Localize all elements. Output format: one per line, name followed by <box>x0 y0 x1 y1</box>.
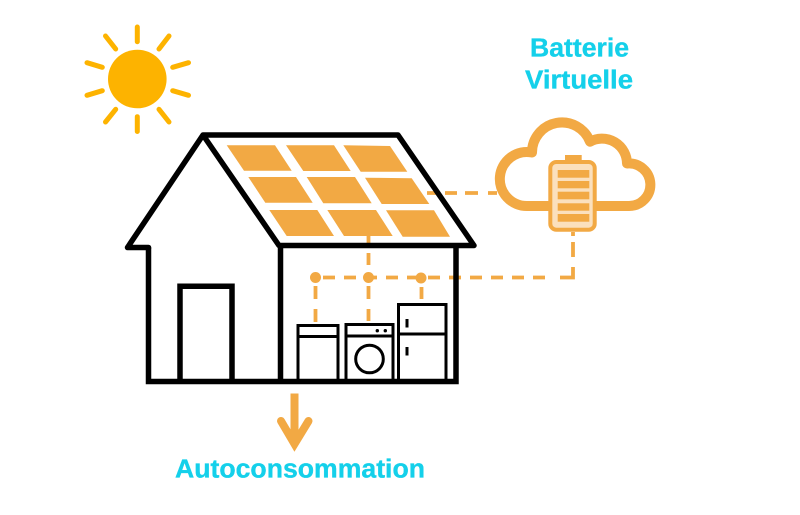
icon: cloud <box>500 122 650 206</box>
connection nodes <box>310 272 426 284</box>
solar panels <box>227 145 450 237</box>
arrow: down <box>281 394 308 444</box>
appliance: washing machine <box>346 324 393 380</box>
door <box>180 286 232 382</box>
heading: Batterie Virtuelle: Virtuelle <box>525 66 633 94</box>
heading: Batterie Virtuelle: Batterie <box>530 34 629 62</box>
icon: sun <box>87 27 188 132</box>
appliance: dishwasher <box>298 326 338 380</box>
house outline <box>128 135 474 382</box>
label: Autoconsommation: Autoconsommation <box>175 456 425 484</box>
appliance: fridge <box>398 304 446 380</box>
icon: battery <box>550 155 595 230</box>
dashed energy lines <box>316 193 573 322</box>
heading: Batterie Virtuelle <box>525 34 633 94</box>
